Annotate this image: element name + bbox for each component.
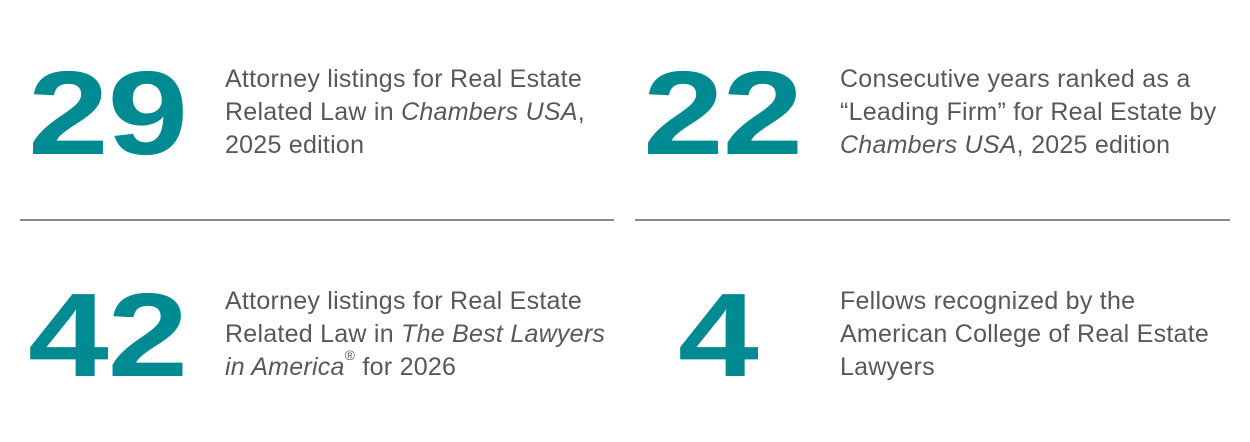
stat: 4: 4 [678,269,758,402]
text: 42 description [225,287,605,381]
text: 42 description: in America® for 2026 [225,347,456,381]
text: 22 description: Consecutive years ranked as a [840,65,1190,93]
text: 29 description: 2025 edition [225,131,364,159]
text: 4 description: American College of Real Estate [840,320,1209,348]
text: 29 description: Related Law in Chambers USA, [225,98,585,126]
text: 22 description: Chambers USA, 2025 edition [840,131,1170,159]
text: 4 description: Lawyers [840,353,935,381]
text: 22 description [840,65,1216,159]
text: 4 description [840,287,1209,381]
text: 42 description: Related Law in The Best Lawyers [225,320,605,348]
stat: 22: 22 [643,47,802,180]
stat: 42: 42 [28,269,187,402]
text: 29 description: Attorney listings for Real Estate [225,65,582,93]
text: 29 description [225,65,585,159]
text: 42 description: Attorney listings for Real Estate [225,287,582,315]
text: 4 description: Fellows recognized by the [840,287,1135,315]
stat: 29: 29 [28,47,187,180]
text: 22 description: “Leading Firm” for Real Estate by [840,98,1216,126]
